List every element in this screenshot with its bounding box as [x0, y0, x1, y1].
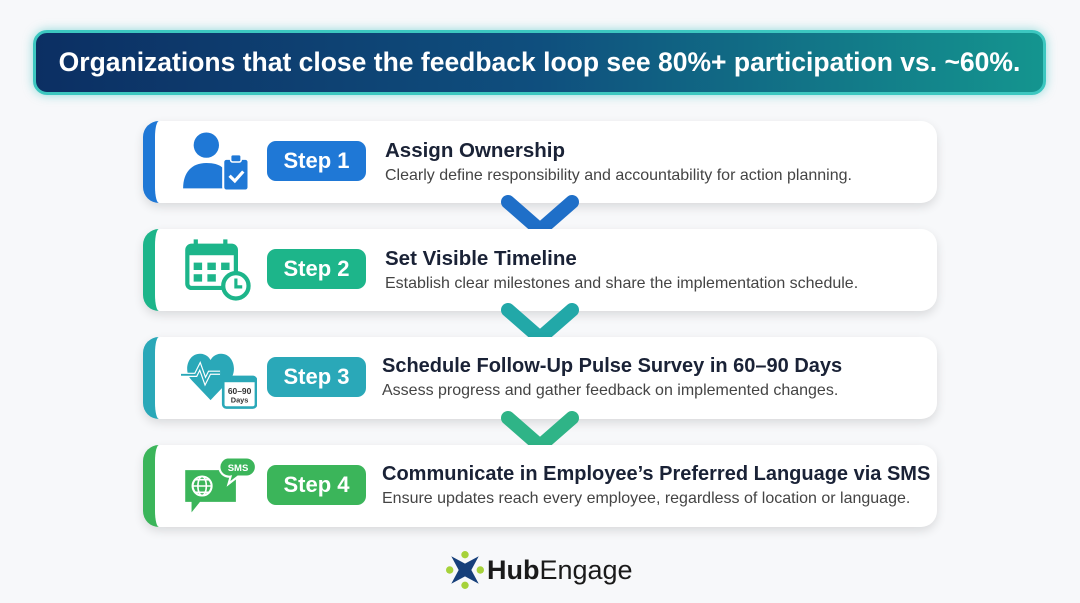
text: step 2: Set Visible Timeline: [385, 247, 577, 270]
text: step 4: Communicate in Employee’s Preferred Language via SMS: [382, 463, 930, 485]
badge: step 3: [267, 357, 366, 397]
icon: SMS chat globe: [185, 458, 255, 512]
logo: HubEngage: HubEngage: [487, 554, 633, 584]
card: step 4: [143, 445, 937, 527]
card: step 1: [143, 121, 937, 203]
badge: step 4: Step 4: [283, 472, 350, 497]
arrow 1: [501, 195, 579, 229]
badge: step 2: Step 2: [283, 256, 350, 281]
icon: heart pulse calendar: Days: [231, 395, 248, 404]
title banner: Organizations that close the feedback loop see 80%+ participation vs. ~60%.: [59, 47, 1020, 77]
icon: heart pulse calendar: 60–90: [228, 386, 252, 396]
arrow 3: [501, 411, 579, 445]
text: step 2: Establish clear milestones and share the implementation schedule.: [385, 275, 858, 292]
text: step 3: Assess progress and gather feedback on implemented changes.: [382, 382, 838, 399]
icon: calendar clock: [185, 239, 251, 301]
card: step 3: [143, 337, 937, 419]
icon: SMS chat globe: SMS: [228, 463, 248, 474]
icon: person with clipboard: [183, 132, 248, 190]
badge: step 3: Step 3: [283, 364, 350, 389]
text: step 2: [385, 247, 858, 292]
badge: step 2: [267, 249, 366, 289]
text: step 1: Clearly define responsibility and accountability for action planning.: [385, 167, 852, 184]
badge: step 4: [267, 465, 366, 505]
card: step 2: [143, 229, 937, 311]
text: step 1: Assign Ownership: [385, 139, 565, 162]
arrow 2: [501, 303, 579, 337]
logo: HubEngage: [446, 551, 633, 589]
text: step 4: [382, 463, 930, 507]
badge: step 1: [267, 141, 366, 181]
text: step 3: [382, 355, 842, 399]
text: step 3: Schedule Follow-Up Pulse Survey in 60–90 Days: [382, 355, 842, 377]
badge: step 1: Step 1: [283, 148, 350, 173]
icon: heart pulse calendar: [181, 354, 257, 409]
text: step 1: [385, 139, 852, 184]
text: step 4: Ensure updates reach every employee, regardless of location or language.: [382, 490, 910, 507]
title banner: [33, 30, 1046, 95]
